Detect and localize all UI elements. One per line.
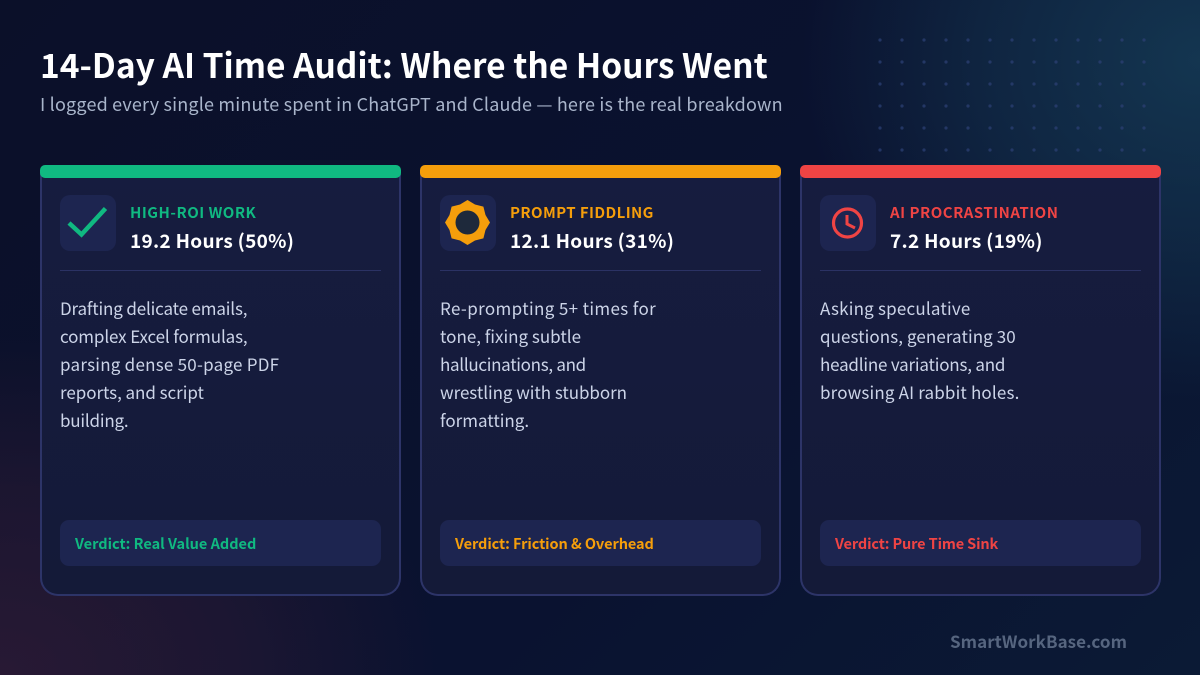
label: AI procrastination: AI PROCRASTINATION	[890, 202, 1058, 223]
icon: check mark	[60, 195, 116, 251]
value: 19.2 hours: 19.2 Hours (50%)	[130, 227, 294, 254]
description: high-ROI work	[60, 295, 279, 432]
subtitle: I logged every single minute spent in ChatGPT and Claude — here is the real breakdown	[40, 91, 783, 117]
description: AI procrastination	[820, 295, 1019, 404]
panel: prompt fiddling	[420, 165, 781, 596]
label: prompt fiddling: PROMPT FIDDLING	[510, 202, 654, 223]
top accent bar	[420, 165, 781, 178]
description: AI procrastination: browsing AI rabbit holes.	[820, 379, 1019, 404]
description: high-ROI work: Drafting delicate emails,	[60, 295, 247, 320]
icon: gear	[440, 195, 496, 251]
verdict: real value added	[60, 520, 381, 566]
top accent bar	[40, 165, 401, 178]
description: high-ROI work: building.	[60, 407, 128, 432]
text: Verdict: Friction & Overhead	[455, 533, 654, 554]
description: high-ROI work: parsing dense 50-page PDF	[60, 351, 279, 376]
description: high-ROI work: reports, and script	[60, 379, 204, 404]
panel: AI procrastination	[800, 165, 1161, 596]
description: prompt fiddling: wrestling with stubborn	[440, 379, 627, 404]
dot grid pattern	[878, 38, 1146, 152]
title: 14-Day AI Time Audit: Where the Hours Went	[40, 39, 768, 88]
description: high-ROI work: complex Excel formulas,	[60, 323, 248, 348]
panel: high-ROI work	[40, 165, 401, 596]
description: AI procrastination: questions, generating 30	[820, 323, 1016, 348]
verdict: friction and overhead	[440, 520, 761, 566]
value: 7.2 hours: 7.2 Hours (19%)	[890, 227, 1043, 254]
description: prompt fiddling: tone, fixing subtle	[440, 323, 581, 348]
text: Verdict: Pure Time Sink	[835, 533, 998, 554]
top accent bar	[800, 165, 1161, 178]
description: prompt fiddling: hallucinations, and	[440, 351, 586, 376]
text: Verdict: Real Value Added	[75, 533, 256, 554]
description: prompt fiddling	[440, 295, 656, 432]
description: prompt fiddling: formatting.	[440, 407, 529, 432]
description: AI procrastination: headline variations, and	[820, 351, 1005, 376]
watermark: SmartWorkBase.com	[950, 628, 1127, 653]
icon: clock	[820, 195, 876, 251]
verdict: pure time sink	[820, 520, 1141, 566]
description: prompt fiddling: Re-prompting 5+ times for	[440, 295, 656, 320]
description: AI procrastination: Asking speculative	[820, 295, 970, 320]
value: 12.1 hours: 12.1 Hours (31%)	[510, 227, 674, 254]
label: high-ROI work: HIGH-ROI WORK	[130, 202, 256, 223]
